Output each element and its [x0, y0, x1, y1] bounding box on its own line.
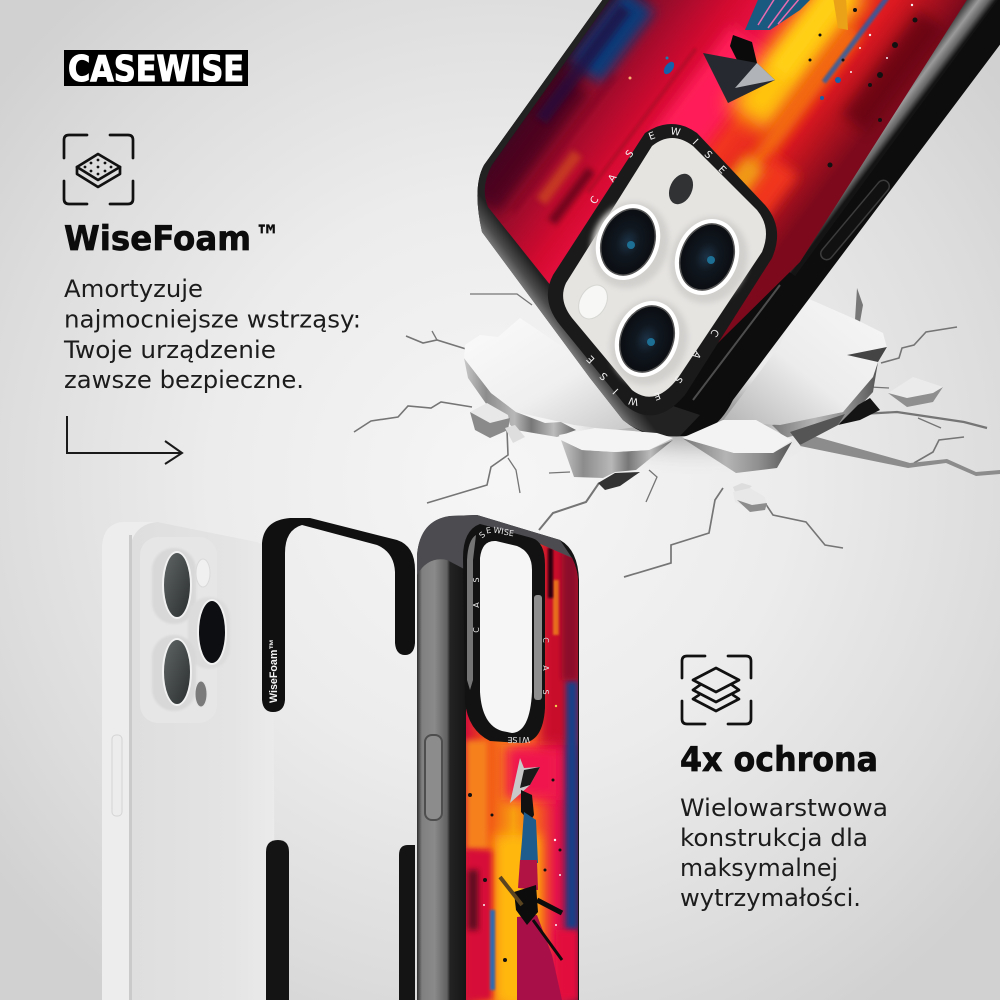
- ring lettering: I: [611, 386, 621, 396]
- text block: WiseFoam description: najmocniejsze wstrząsy:: [64, 306, 361, 334]
- center rock fragments: [559, 420, 792, 490]
- ring lettering: C: [541, 637, 550, 643]
- artwork: [466, 530, 582, 1000]
- heading: WiseFoam: ™: [255, 219, 280, 255]
- paint splatter: [468, 778, 562, 962]
- ring lettering: E: [716, 164, 728, 176]
- logo: CASEWISE: [68, 49, 244, 90]
- camera plate: [563, 138, 766, 397]
- ring lettering: E: [585, 353, 597, 365]
- foam label: WiseFoam™: [268, 639, 280, 703]
- top phone in case: [470, 0, 1000, 436]
- ring lettering: S: [598, 370, 610, 382]
- camera ring side view: [463, 524, 545, 743]
- right rock fragment: [722, 288, 887, 445]
- text block: WiseFoam description: Amortyzuje: [64, 275, 203, 303]
- ring lettering: W: [670, 126, 681, 139]
- sensor: [195, 681, 207, 707]
- ring lettering: S: [702, 149, 714, 161]
- text block: 4x protection description: wytrzymałości.: [680, 884, 861, 912]
- ring lettering: E: [647, 130, 657, 143]
- ring lettering: E: [652, 389, 662, 402]
- ring lettering: S: [541, 689, 550, 695]
- case side button: [818, 178, 892, 262]
- side button: [425, 735, 442, 820]
- paint splatter: [808, 8, 918, 168]
- ring lettering: S: [512, 735, 518, 744]
- ring lettering: S: [478, 530, 487, 540]
- phone side frame: [102, 522, 157, 1000]
- ring lettering: A: [541, 665, 550, 671]
- text block: WiseFoam description: Twoje urządzenie: [63, 336, 276, 364]
- text block: 4x protection description: Wielowarstwowa: [680, 794, 888, 822]
- cracks in the wall: [354, 294, 1000, 577]
- case right metallic band: [777, 0, 1000, 276]
- flash and sensor: [573, 170, 698, 324]
- foam frame: [262, 518, 415, 712]
- text block: WiseFoam description: zawsze bezpieczne.: [64, 366, 304, 394]
- foam lower left bar: [266, 840, 289, 1000]
- side wall: [417, 515, 579, 1000]
- foam lower right bar: [399, 845, 415, 1000]
- ring lettering: S: [672, 373, 684, 385]
- ring lettering: A: [472, 602, 481, 608]
- ring lettering: W: [493, 526, 502, 536]
- lenses: [578, 190, 761, 397]
- left rock fragment: [464, 318, 650, 437]
- text block: 4x protection description: [680, 794, 888, 912]
- ring lettering: C: [708, 326, 721, 338]
- ring lettering: [585, 126, 728, 407]
- arrow: [67, 416, 182, 464]
- ring lettering: S: [624, 148, 636, 160]
- ring lettering: A: [689, 348, 703, 361]
- ring lettering: [472, 526, 550, 744]
- text block: 4x protection description: konstrukcja dla: [680, 824, 868, 852]
- ring lettering: C: [588, 195, 601, 207]
- ring lettering: C: [472, 627, 481, 633]
- ring lettering: S: [472, 577, 481, 583]
- ring lettering: A: [606, 172, 620, 185]
- ring lettering: E: [485, 526, 492, 535]
- samurai on top case: [703, 0, 848, 103]
- text block: WiseFoam description: [63, 275, 361, 394]
- heading: 4x ochrona: 4x ochrona: [680, 740, 878, 780]
- small rocks: [470, 377, 943, 512]
- phone body: [132, 522, 275, 1000]
- icon: layers: [682, 656, 751, 724]
- case lower-left translucent edge: [477, 0, 700, 436]
- ring lettering: W: [628, 394, 639, 407]
- heading: WiseFoam: WiseFoam: [64, 219, 251, 259]
- white iPhone: [102, 522, 275, 1000]
- ring silver highlights: [467, 535, 542, 700]
- ring lettering: W: [522, 735, 530, 744]
- WiseFoam black layer: [262, 518, 415, 1000]
- case top shade: [417, 515, 572, 575]
- ring lettering: E: [508, 529, 514, 538]
- text block: 4x protection description: maksymalnej: [680, 854, 838, 882]
- flash: [196, 559, 210, 587]
- ring lettering: I: [519, 735, 521, 744]
- camera plateau: [140, 537, 217, 723]
- ring lettering: E: [507, 735, 513, 744]
- lens 3: [152, 635, 196, 711]
- side button: [112, 735, 122, 816]
- camera hole: [480, 541, 532, 733]
- shadow of the impact: [590, 387, 790, 443]
- lens 1: [152, 548, 196, 624]
- painted case side view: [417, 515, 582, 1000]
- top painting artwork: [484, 0, 967, 344]
- lens 2: [188, 597, 230, 669]
- ring lettering: S: [503, 528, 509, 537]
- ring lettering: I: [690, 137, 700, 147]
- case outer shell: [477, 0, 1000, 436]
- samurai figure: [500, 758, 562, 1000]
- ring lettering: I: [501, 527, 504, 536]
- camera ring: [548, 124, 777, 415]
- icon: foam: [64, 135, 133, 204]
